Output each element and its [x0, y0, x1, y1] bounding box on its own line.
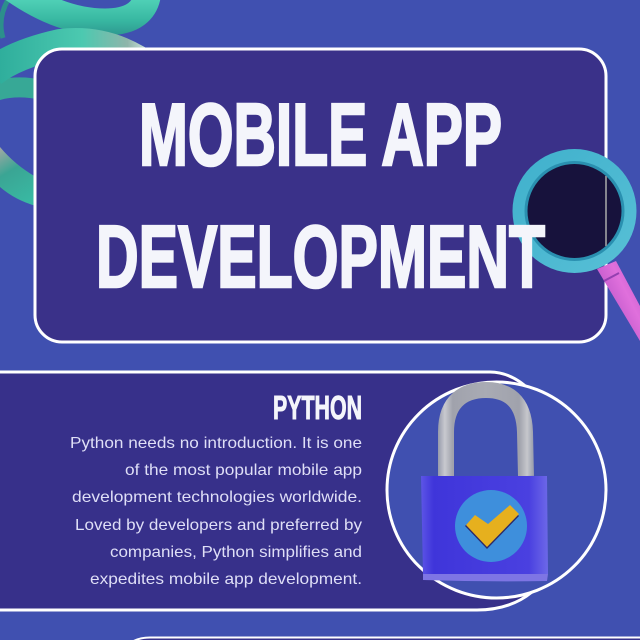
- icon: padlock: [421, 390, 548, 581]
- icon: magnifying glass: [512, 149, 640, 341]
- text block: python description: Python needs no introduction. It is one: [70, 435, 362, 452]
- panel: python card: [0, 372, 532, 610]
- title: [96, 85, 545, 306]
- text block: python description: development technologies worldwide.: [72, 489, 362, 506]
- text block: python description: companies, Python simplifies and: [110, 544, 362, 561]
- decorative teal coil: [0, 0, 152, 206]
- text block: python description: expedites mobile app development.: [90, 571, 362, 588]
- text block: python description: Loved by developers and preferred by: [75, 517, 362, 534]
- panel: lock circle: [387, 382, 606, 598]
- panel: title card: [35, 49, 606, 342]
- text block: python description: [70, 435, 362, 588]
- heading: python: PYTHON: [273, 389, 362, 426]
- panel: next card top edge: [128, 638, 640, 640]
- text block: python description: of the most popular mobile app: [125, 462, 362, 479]
